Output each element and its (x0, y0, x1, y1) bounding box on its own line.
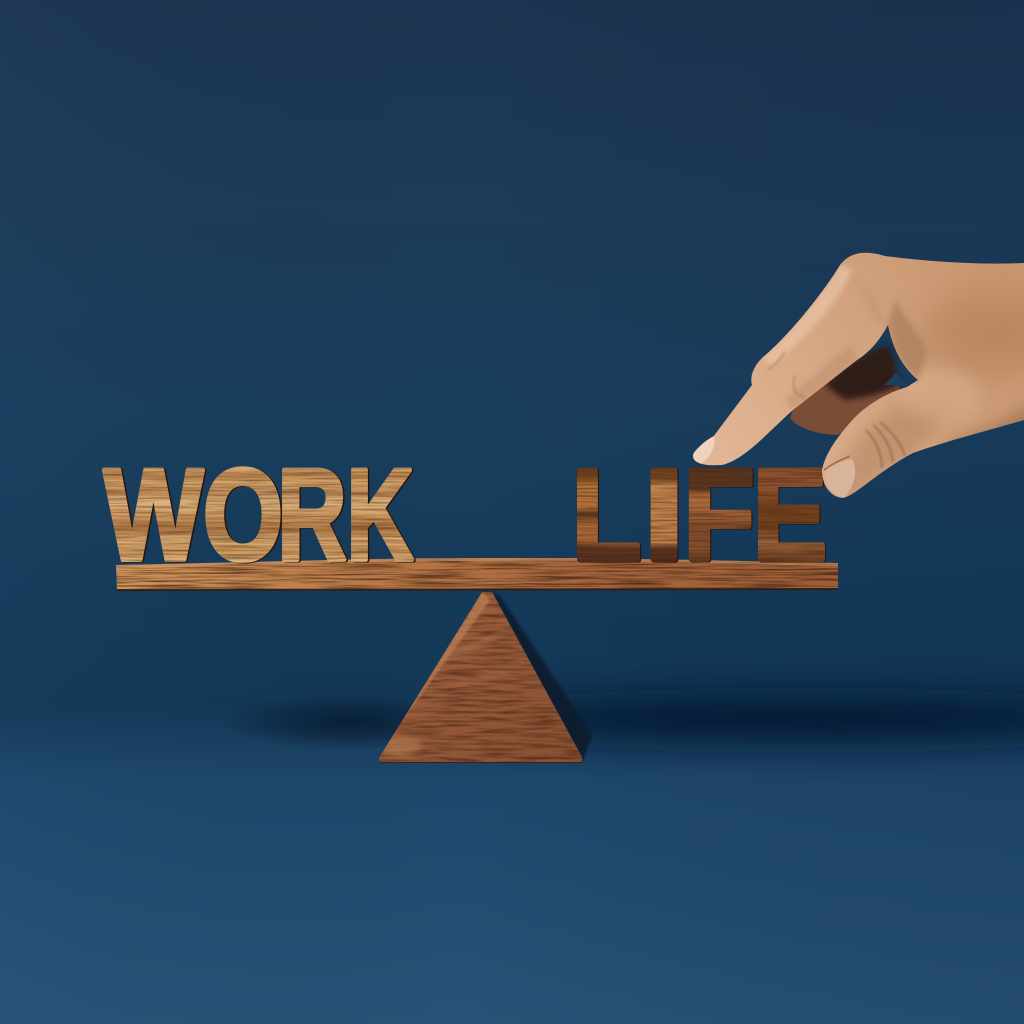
letter O: O (203, 442, 283, 587)
thumbnail (824, 459, 855, 497)
letter F: F (683, 443, 755, 588)
wooden word: LIFE (572, 442, 828, 588)
letter L: L (572, 442, 641, 587)
index finger knuckle creases (768, 352, 806, 398)
letter O: O (205, 442, 284, 588)
letter R: R (279, 444, 348, 588)
gap between fingers showing backdrop (884, 373, 911, 386)
letter R: R (277, 443, 347, 588)
letter W: W (104, 443, 204, 588)
thumb knuckle creases (866, 422, 905, 468)
dark right side of the fulcrum (492, 592, 592, 763)
wooden word: WORK (104, 442, 415, 589)
floor shadow beneath the seesaw (220, 694, 1024, 750)
index fingernail (693, 436, 714, 463)
hand shading (762, 265, 1024, 505)
letter E: E (753, 442, 827, 587)
letter K: K (347, 442, 413, 587)
letter F: F (684, 443, 756, 588)
letter I: I (645, 443, 685, 588)
letter W: W (105, 444, 205, 589)
letter E: E (754, 442, 828, 588)
hand pinching the E of LIFE (693, 253, 1024, 505)
hidden middle fingers in shadow (790, 352, 900, 435)
letter L: L (573, 442, 642, 588)
skin silhouette of back of hand, index finger and thumb (693, 253, 1024, 498)
letter K: K (348, 442, 415, 588)
triangular wooden fulcrum (378, 592, 582, 763)
wooden seesaw beam (116, 558, 838, 591)
letter I: I (644, 442, 684, 588)
